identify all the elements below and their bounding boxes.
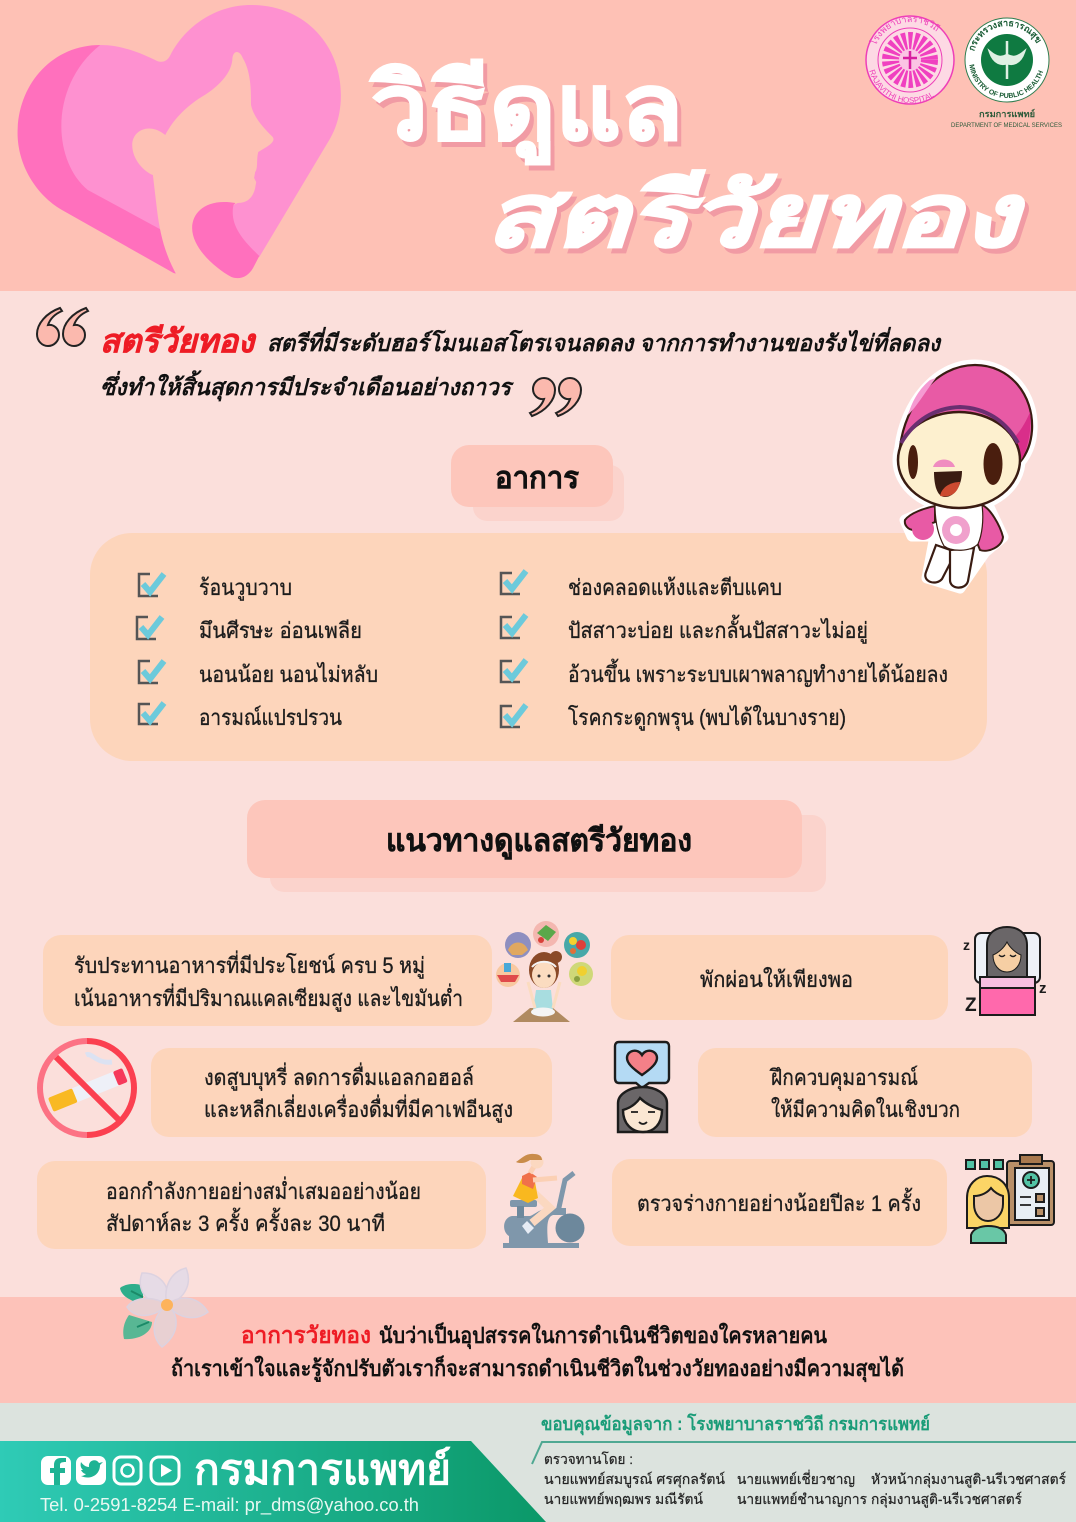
symptoms list: left column: มึนศีรษะ อ่อนเพลีย [199,618,362,643]
icon: sleeping woman: z [963,937,970,953]
logo: Rajavithi Hospital [865,15,955,105]
symptom check icons [137,571,526,727]
logo: Department of Medical Services: กรมการแพทย์ [979,108,1035,119]
icon: frangipani flower [120,1268,208,1347]
logo: Department of Medical Services: DEPARTMENT OF MEDICAL SERVICES [951,123,1062,129]
symptoms list: right column: ช่องคลอดแห้งและตีบแคบ [568,575,782,600]
card: exercise: ออกกำลังกายอย่างสม่ำเสมออย่างน้อย [106,1176,421,1204]
mascot [898,365,1032,588]
bottom message text [171,1321,904,1383]
icon: closing quotation marks [530,378,581,416]
reviewers text: กลุ่มงานสูติ-นรีเวชศาสตร์ [871,1491,1022,1508]
icon: sleeping woman: Z [965,995,977,1016]
icon: no smoking [40,1041,134,1135]
card: nutrition [43,935,492,1026]
card: annual checkup [612,1159,947,1246]
symptoms list: left column: ร้อนวูบวาบ [199,575,292,601]
footer teal contact block [0,1441,546,1522]
card: avoid smoking and alcohol: งดสูบบุหรี่ ลดการดื่มแอลกอฮอล์ [204,1062,474,1091]
card: rest: พักผ่อนให้เพียงพอ [700,967,853,992]
card: exercise: สัปดาห์ละ 3 ครั้ง ครั้งละ 30 นาที [106,1208,385,1236]
symptoms list: right column: อ้วนขึ้น เพราะระบบเผาพลาญทำงายได้น้อยลง [568,659,948,687]
intro text: สตรีวัยทอง [100,323,256,359]
icon: woman with heart bubble [615,1042,669,1132]
bottom message text: ถ้าเราเข้าใจและรู้จักปรับตัวเราก็จะสามารถดำเนินชีวิตในช่วงวัยทองอย่างมีความสุขได้ [171,1354,904,1383]
title line 1: วิธีดูแล [370,57,683,165]
logo: Rajavithi Hospital: โรงพยาบาลราชวิถี [868,17,940,44]
bottom message text: อาการวัยทอง [241,1322,371,1348]
logo: Department of Medical Services: MINISTRY OF PUBLIC HEALTH [969,64,1043,98]
icon: opening quotation marks [37,308,88,346]
card: emotional control: ฝึกควบคุมอารมณ์ [769,1065,918,1091]
symptoms heading pill [451,445,624,521]
footer background [0,1403,1076,1522]
reviewers text: ตรวจทานโดย : [544,1451,633,1467]
title line 1: วิธีดูแล [374,62,687,170]
header banner [0,0,1076,291]
credits divider [532,1442,1076,1464]
title line 2: สตรีวัยทอง [485,166,1026,265]
logo: Rajavithi Hospital: RAJAVITHI HOSPITAL [870,70,934,103]
footer teal contact block: กรมการแพทย์ [194,1446,451,1493]
icon: woman with food groups [496,921,593,1022]
reviewers text: นายแพทย์พฤฒพร มณีรัตน์ [544,1491,703,1507]
credits heading: ขอบคุณข้อมูลจาก : โรงพยาบาลราชวิถี กรมการแพทย์ [541,1413,930,1436]
icon: woman on exercise bike [503,1154,584,1248]
card: nutrition: รับประทานอาหารที่มีประโยชน์ ครบ 5 หมู่ [74,950,425,979]
symptoms list: right column: ปัสสาวะบ่อย และกลั้นปัสสาวะไม่อยู่ [568,615,868,644]
card: nutrition: เน้นอาหารที่มีปริมาณแคลเซียมสูง และไขมันต่ำ [74,983,463,1012]
guideline heading pill: แนวทางดูแลสตรีวัยทอง [386,823,692,860]
symptoms panel [90,533,987,761]
reviewers text: นายแพทย์เชี่ยวชาญ [737,1470,855,1487]
card: exercise [37,1161,486,1249]
symptoms list: left column: นอนน้อย นอนไม่หลับ [199,662,378,687]
symptoms list: left column: อารมณ์แปรปรวน [199,705,342,730]
card: emotional control [698,1048,1032,1137]
title line 2: สตรีวัยทอง [489,171,1030,270]
reviewers text: หัวหน้ากลุ่มงานสูติ-นรีเวชศาสตร์ [871,1471,1066,1488]
icon: sleeping woman: z [1039,980,1046,997]
icon: heart with woman profile [18,5,341,278]
card: rest [611,935,948,1020]
reviewers text [544,1451,1066,1508]
reviewers text: นายแพทย์ชำนาญการ [737,1491,867,1507]
card: avoid smoking and alcohol [151,1048,552,1137]
card: emotional control: ให้มีความคิดในเชิงบวก [771,1097,960,1122]
logo: Department of Medical Services: กระทรวงสาธารณสุข [970,20,1041,51]
logo: Department of Medical Services [951,18,1062,129]
reviewers text: นายแพทย์สมบูรณ์ ศรศุกลรัตน์ [544,1471,725,1488]
symptoms heading pill: อาการ [495,462,579,495]
icon: sleeping woman [963,927,1046,1016]
intro text [100,323,942,402]
card: annual checkup: ตรวจร่างกายอย่างน้อยปีละ 1 ครั้ง [637,1188,921,1216]
footer teal contact block: Tel. 0-2591-8254 E-mail: pr_dms@yahoo.co.th [40,1495,419,1516]
card: avoid smoking and alcohol: และหลีกเลี่ยงเครื่องดื่มที่มีคาเฟอีนสูง [204,1094,513,1123]
symptoms list: right column: โรคกระดูกพรุน (พบได้ในบางราย) [568,705,846,731]
intro text: สตรีที่มีระดับฮอร์โมนเอสโตรเจนลดลง จากการทำงานของรังไข่ที่ลดลง [267,326,942,356]
bottom message text: นับว่าเป็นอุปสรรคในการดำเนินชีวิตของใครหลายคน [379,1321,827,1350]
symptoms list: right column [568,575,948,731]
bottom message band [0,1297,1076,1403]
symptoms list: left column [199,575,378,730]
guideline heading pill [247,800,826,892]
intro text: ซึ่งทำให้สิ้นสุดการมีประจำเดือนอย่างถาวร [100,370,515,402]
icon: woman with health checklist [966,1155,1054,1243]
